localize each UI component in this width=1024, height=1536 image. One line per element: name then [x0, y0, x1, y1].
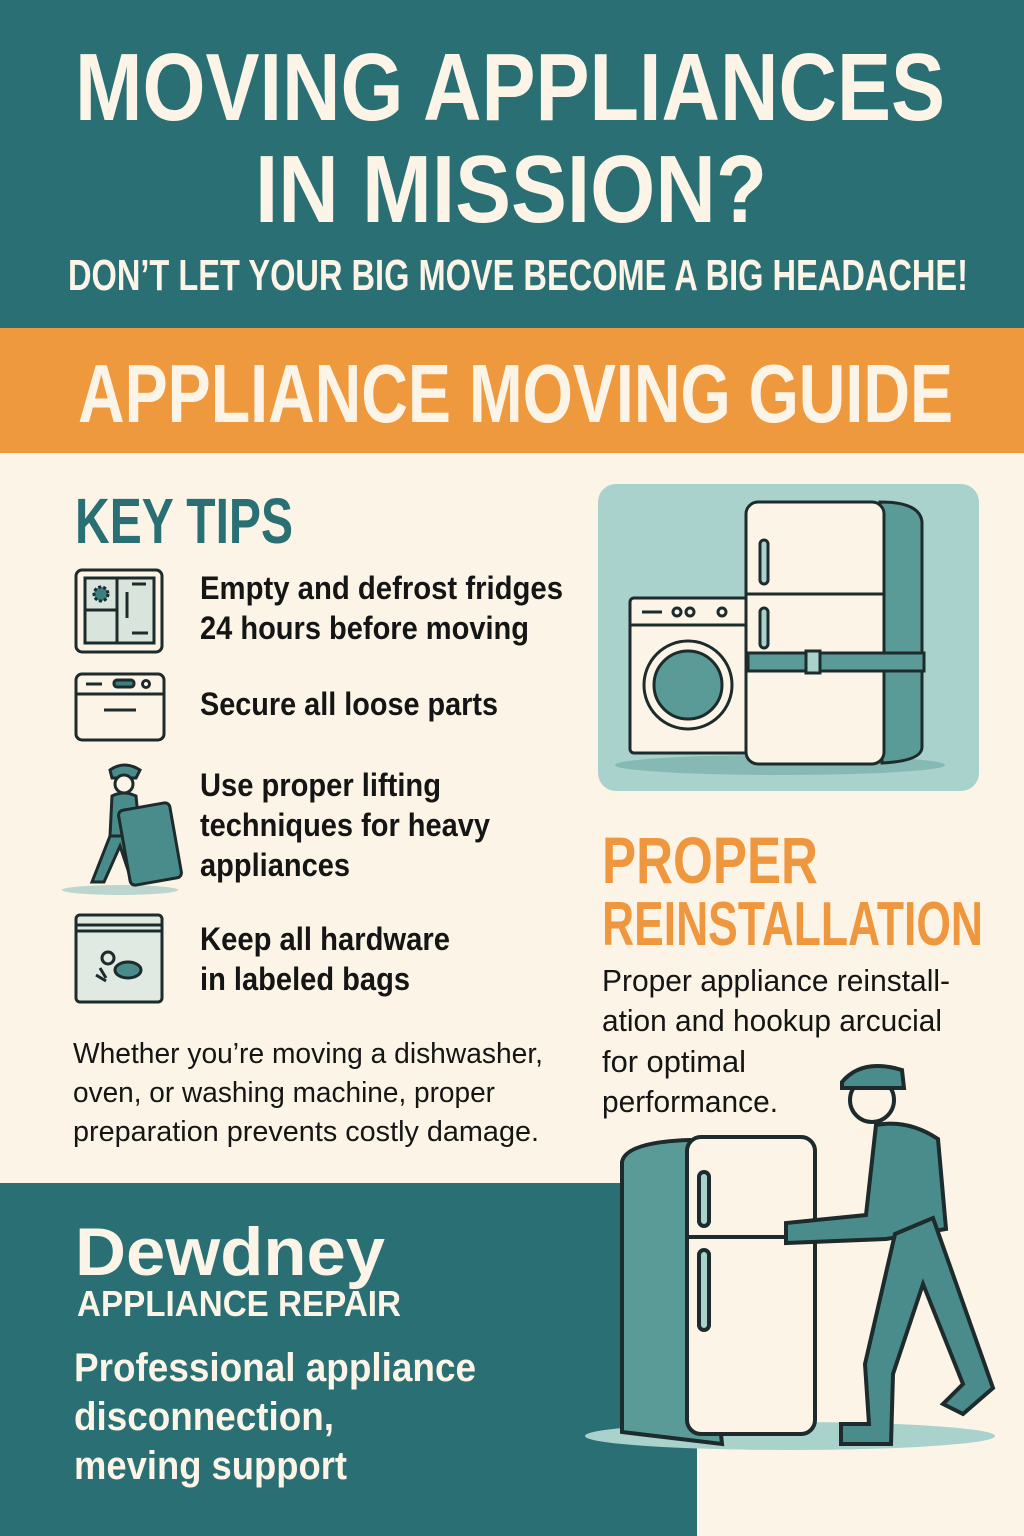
title: IN MISSION? — [255, 136, 767, 243]
tip 2: oven icon + text — [76, 674, 498, 740]
brand tagline: meving support — [74, 1444, 347, 1488]
brand tagline: disconnection, — [74, 1395, 334, 1439]
title — [75, 34, 945, 243]
tip 3: mover icon + text: appliances — [200, 847, 350, 883]
text block: reinstallation description: performance. — [602, 1084, 778, 1119]
tip 4: bag icon + text: Keep all hardware — [200, 921, 450, 957]
fridge — [880, 502, 922, 763]
text block: reinstallation description: Proper appliance reinstall- — [602, 963, 950, 998]
tip 3: mover icon + text — [62, 765, 490, 895]
icon: oven — [76, 674, 164, 740]
icon: fridge — [76, 570, 162, 652]
header band — [0, 0, 1024, 328]
tip 1: fridge icon + text — [76, 570, 563, 652]
brand tagline: Professional appliance — [74, 1346, 476, 1390]
tip 4: bag icon + text: in labeled bags — [200, 961, 410, 997]
icon: hardware bag — [76, 915, 162, 1002]
text block: preparation note: Whether you’re moving a dishwasher, — [73, 1038, 543, 1070]
person — [786, 1124, 946, 1243]
text block: preparation note: preparation prevents costly damage. — [73, 1116, 539, 1148]
text block: preparation note: oven, or washing machine, proper — [73, 1077, 495, 1109]
orange banner — [0, 328, 1024, 453]
tip 1: fridge icon + text: 24 hours before moving — [200, 610, 529, 646]
tip 1: fridge icon + text: Empty and defrost fridges — [200, 570, 563, 606]
tip 3: mover icon + text: Use proper lifting — [200, 767, 441, 803]
text block: reinstallation description: ation and hookup arcucial — [602, 1003, 942, 1038]
illustration panel: washer and fridge — [598, 484, 979, 791]
heading: key tips: KEY TIPS — [75, 485, 293, 557]
brand subtitle: APPLIANCE REPAIR — [77, 1283, 401, 1324]
tip 2: oven icon + text: Secure all loose parts — [200, 686, 498, 722]
heading: proper reinstallation: PROPER — [602, 823, 818, 897]
tip 3: mover icon + text: techniques for heavy — [200, 807, 490, 843]
brand panel — [0, 1183, 697, 1536]
heading: proper reinstallation — [602, 823, 983, 959]
washer — [630, 598, 748, 753]
icon: mover with box — [62, 765, 182, 895]
brand name: Dewdney — [75, 1214, 385, 1290]
illustration: technician moving fridge — [585, 1066, 995, 1450]
text block: reinstallation description: for optimal — [602, 1044, 746, 1079]
tip 4: bag icon + text — [76, 915, 450, 1002]
